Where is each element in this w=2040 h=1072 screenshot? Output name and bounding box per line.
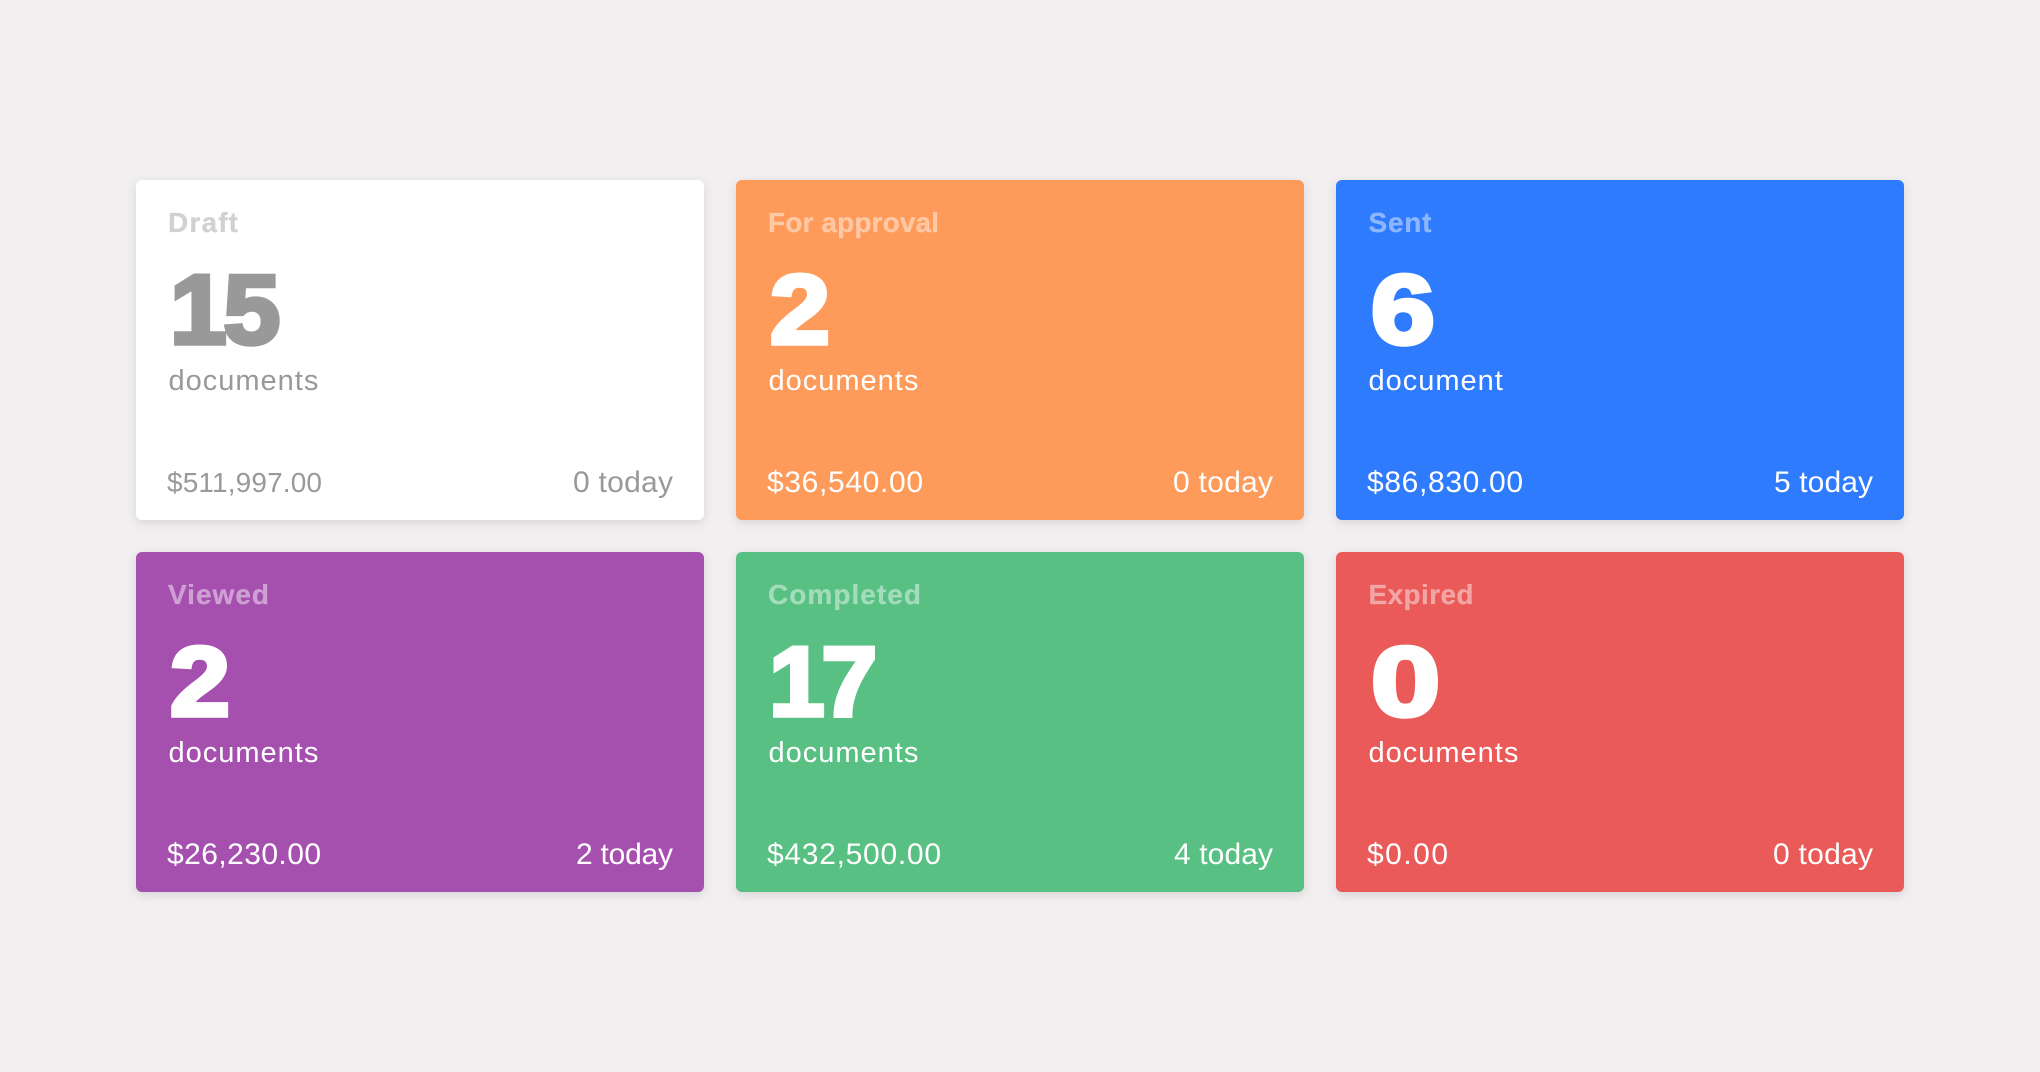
caption: documents: documents (1368, 737, 1519, 769)
heading: Sent: Sent (1368, 207, 1432, 238)
amount: $432,500.00 (767, 838, 941, 871)
caption: documents: documents (168, 737, 319, 769)
amount: $26,230.00 (167, 838, 321, 871)
number: 2: 2 (770, 255, 827, 364)
caption: document: document (1368, 365, 1504, 397)
caption: documents: documents (168, 365, 319, 397)
amount: $86,830.00 (1367, 466, 1523, 499)
panel: Sent (1336, 180, 1904, 520)
today count: 0 today (1173, 466, 1273, 499)
number: 0: 0 (1371, 627, 1436, 736)
amount: $36,540.00 (767, 466, 923, 499)
heading: Expired: Expired (1368, 579, 1474, 610)
today count: 0 today (1773, 838, 1873, 871)
panel: For approval (736, 180, 1304, 520)
today count: 5 today (1774, 466, 1873, 499)
number: 17: 17 (769, 626, 874, 736)
panel: Completed (736, 552, 1304, 892)
heading: Draft: Draft (168, 207, 238, 238)
panel: Expired (1336, 552, 1904, 892)
today count: 0 today (573, 466, 673, 499)
heading: Viewed: Viewed (168, 579, 269, 610)
heading: Completed: Completed (768, 579, 921, 610)
caption: documents: documents (768, 365, 919, 397)
amount: $511,997.00 (167, 467, 322, 498)
panel: Viewed (136, 552, 704, 892)
panel: Draft (136, 180, 704, 520)
caption: documents: documents (768, 737, 919, 769)
today count: 2 today (576, 838, 673, 871)
number: 2: 2 (170, 627, 227, 736)
number: 6: 6 (1371, 254, 1431, 365)
amount: $0.00 (1367, 838, 1448, 871)
number: 15: 15 (170, 255, 278, 365)
today count: 4 today (1174, 838, 1273, 871)
heading: For approval: For approval (768, 207, 939, 238)
